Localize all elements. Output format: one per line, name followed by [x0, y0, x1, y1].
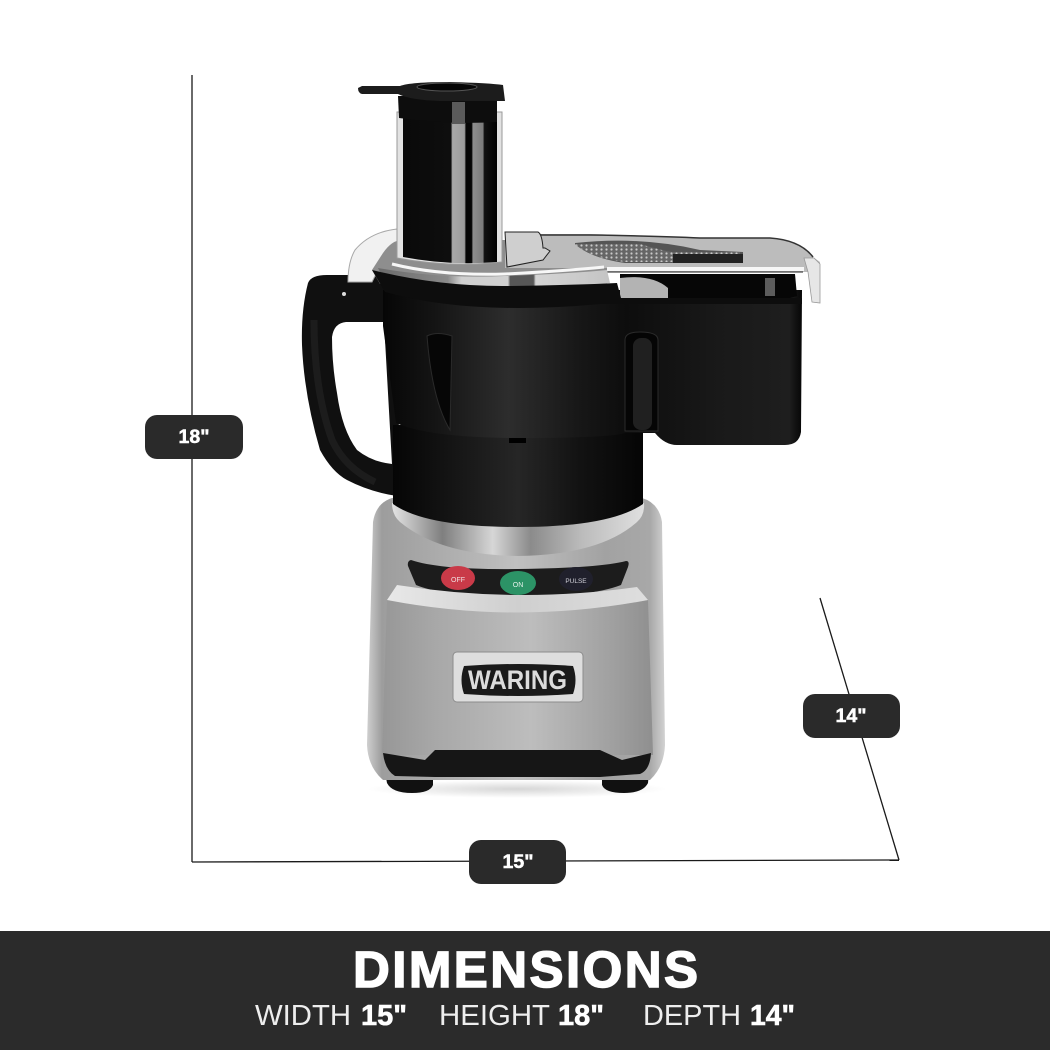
clear lid on tray — [505, 234, 820, 303]
clear feed chute — [397, 112, 502, 264]
clear lid rear flap — [348, 229, 397, 282]
dimensions summary: 15" — [361, 1000, 407, 1032]
discharge opening — [620, 274, 797, 298]
base front panel — [382, 600, 653, 755]
black bottom strip — [383, 750, 651, 777]
width label pill: 15" — [503, 851, 533, 873]
brand badge — [453, 652, 583, 702]
pusher collar — [398, 96, 497, 123]
on button — [500, 571, 536, 595]
pusher cap opening — [417, 83, 477, 91]
title: DIMENSIONS — [353, 941, 698, 998]
base shadow — [367, 780, 667, 798]
height label pill — [145, 415, 243, 459]
off button — [441, 566, 475, 590]
dimensions summary: WIDTH — [255, 1000, 351, 1032]
dimensions summary: DEPTH — [643, 1000, 741, 1032]
handle highlight — [314, 320, 375, 482]
pulse button: PULSE — [565, 578, 587, 585]
depth label pill: 14" — [836, 705, 866, 727]
tray end lip — [804, 258, 820, 303]
width dimension line — [192, 860, 899, 862]
footer band — [0, 931, 1050, 1050]
pusher — [403, 102, 497, 263]
base front light edge — [387, 585, 648, 612]
tray black band — [673, 254, 743, 263]
brand badge: WARING — [468, 665, 567, 695]
dimensions summary — [255, 1000, 795, 1032]
tray dark area — [575, 241, 743, 263]
lower bowl — [393, 425, 643, 527]
pulse button — [559, 567, 593, 591]
dimensions summary: HEIGHT — [439, 1000, 550, 1032]
control panel — [408, 560, 629, 597]
dimensions summary: 14" — [750, 1000, 795, 1032]
dimensions summary: 18" — [558, 1000, 604, 1032]
lid rim highlight — [392, 264, 604, 274]
tray highlight — [607, 267, 804, 271]
width label pill — [469, 840, 566, 884]
lid front band — [378, 268, 610, 287]
handle — [302, 275, 402, 496]
food processor product illustration — [302, 82, 820, 798]
lid black rim — [372, 270, 802, 308]
bowl grip left — [427, 334, 452, 430]
tray top edge — [540, 235, 813, 257]
feet — [385, 772, 649, 793]
latch on lid — [505, 232, 550, 267]
metal base — [367, 498, 665, 780]
height label pill: 18" — [179, 426, 209, 448]
off button: OFF — [451, 577, 465, 584]
tray speckled disc — [575, 244, 740, 262]
pusher cap — [358, 82, 505, 101]
height dimension line — [191, 75, 193, 862]
bowl grip right — [625, 332, 658, 431]
handle rivet — [342, 292, 346, 296]
work bowl — [383, 290, 802, 445]
small notch — [509, 438, 526, 443]
lid surface — [372, 240, 607, 284]
bowl seat ring — [392, 503, 644, 556]
depth label pill — [803, 694, 900, 738]
depth dimension line — [820, 598, 899, 860]
on button: ON — [513, 582, 523, 589]
